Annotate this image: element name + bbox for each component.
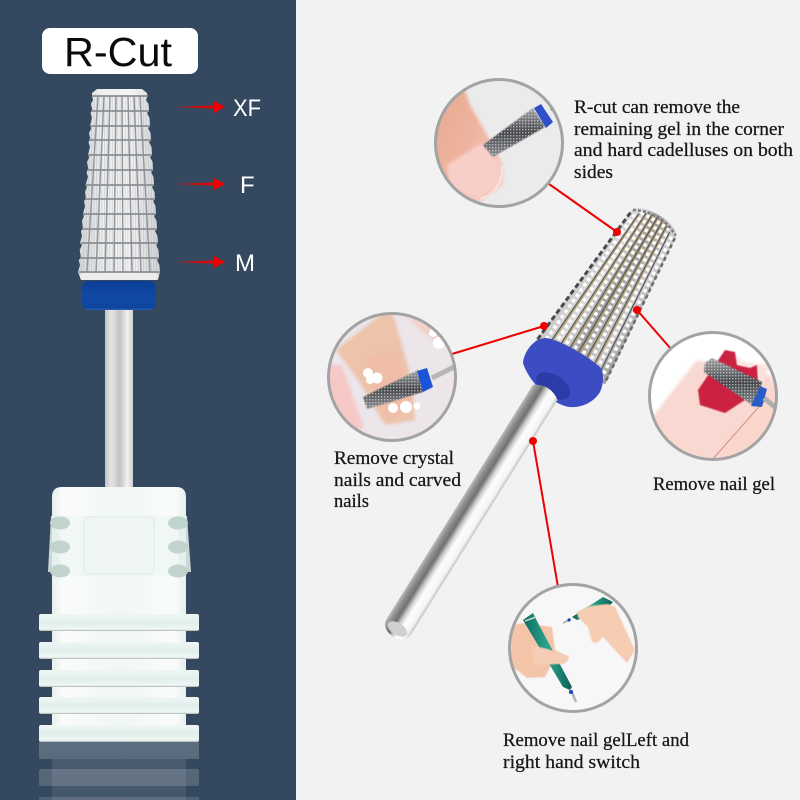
text: top callout xyxy=(574,98,793,183)
text: top callout: and hard cadelluses on both xyxy=(574,141,793,161)
text: top callout: R-cut can remove the xyxy=(574,98,740,118)
text: left callout: nails and carved xyxy=(334,471,462,491)
drill bit shaft xyxy=(105,306,133,490)
connector: top callout xyxy=(549,184,621,236)
blue collar xyxy=(523,338,603,407)
angled drill bit xyxy=(380,194,694,644)
connector: right callout xyxy=(633,306,671,349)
label: XF: XF xyxy=(233,95,261,122)
cutter xyxy=(535,194,694,384)
photo circle: bit on crystal nail xyxy=(326,313,456,440)
text: top callout: sides xyxy=(574,163,613,183)
text: right callout: Remove nail gel xyxy=(653,475,775,495)
text: left callout xyxy=(334,449,462,512)
collar hole xyxy=(531,367,575,405)
text: left callout: nails xyxy=(334,492,369,512)
text: bottom callout: Remove nail gelLeft and xyxy=(503,731,690,751)
shaft xyxy=(380,380,560,644)
tapered cutter head xyxy=(78,89,160,280)
photo circle: left and right hand use xyxy=(510,584,636,712)
text: bottom callout xyxy=(503,731,690,773)
panel: navy product panel xyxy=(0,0,296,800)
text: bottom callout: right hand switch xyxy=(503,753,640,773)
label: M: M xyxy=(235,250,255,277)
label: F: F xyxy=(240,172,255,199)
blue collar xyxy=(82,281,156,310)
connector: left callout xyxy=(452,322,548,354)
title badge: R-Cut: R-Cut xyxy=(64,29,173,75)
arrow: XF xyxy=(172,101,225,113)
text: left callout: Remove crystal xyxy=(334,449,454,469)
holder reflection xyxy=(39,742,199,800)
title badge: R-Cut xyxy=(42,28,198,75)
photo circle: bit on nail corner xyxy=(434,78,564,208)
arrow: F xyxy=(172,178,225,190)
white plastic holder xyxy=(39,487,199,742)
arrow: M xyxy=(172,256,225,268)
photo circle: bit removing red gel xyxy=(650,332,790,465)
text: top callout: remaining gel in the corner xyxy=(574,120,784,140)
connector: bottom callout xyxy=(529,437,558,587)
